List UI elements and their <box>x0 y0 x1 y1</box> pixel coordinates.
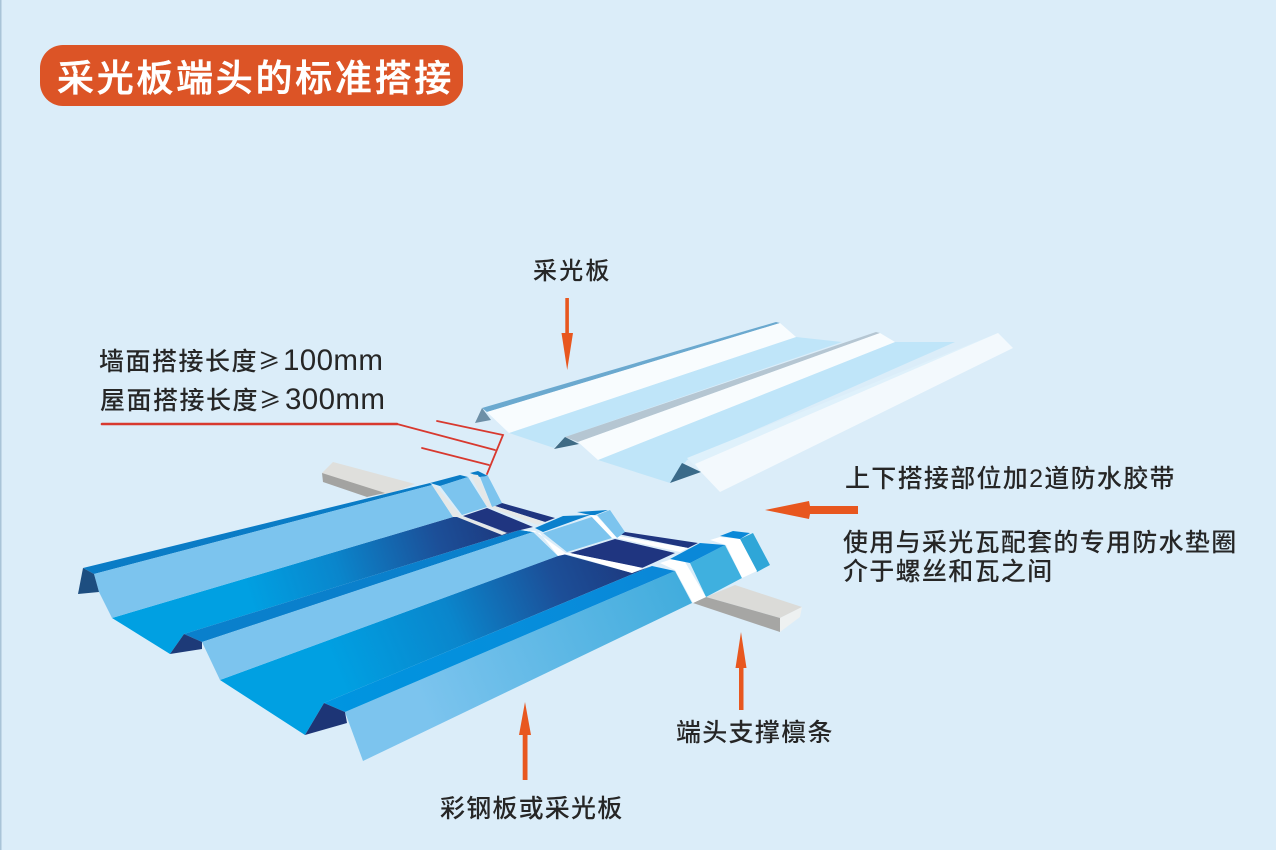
face 2 <box>202 532 558 680</box>
arrow: down to skylight panel <box>562 298 573 370</box>
label: washer instruction <box>843 529 1238 586</box>
pale strip 3 <box>687 333 1005 472</box>
title: 采光板端头的标准搭接 <box>57 58 454 99</box>
ridge strip 1 <box>482 322 780 412</box>
arrow: up to steel panel <box>519 702 531 780</box>
ridge strip 3 <box>324 566 675 712</box>
label: lap lengths: 300mm <box>285 383 385 416</box>
label: washer instruction: 介于螺丝和瓦之间 <box>843 558 1053 586</box>
label: lap lengths: ≥ <box>258 344 280 376</box>
tape on face 1 <box>432 485 462 517</box>
title <box>40 45 463 106</box>
label: steel panel: 彩钢板或采光板 <box>440 795 623 823</box>
ridge strip 2 <box>184 530 533 642</box>
valley 1 <box>509 337 842 448</box>
label: purlin: 端头支撑檩条 <box>676 719 834 747</box>
end triangle 3 <box>670 463 701 483</box>
strip pieces on ridge 3 <box>670 543 725 563</box>
end triangle 2 <box>554 437 579 449</box>
label: washer instruction: 使用与采光瓦配套的专用防水垫圈 <box>843 529 1238 557</box>
end triangles <box>78 568 99 594</box>
ridge strip 1 <box>83 483 432 574</box>
label: skylight panel: 采光板 <box>533 258 612 285</box>
strip pieces beyond tape <box>535 515 590 532</box>
valley 1 <box>112 517 520 654</box>
label: lap lengths: ≥ <box>259 383 281 415</box>
far valley section 1 <box>495 503 555 522</box>
label: tape instruction: 上下搭接部位加2道防水胶带 <box>845 465 1176 493</box>
label: lap lengths: 墙面搭接长度 <box>99 348 258 376</box>
white face 3 <box>695 333 1013 492</box>
ridge strip 2 <box>565 332 880 442</box>
valley 2 <box>220 554 652 735</box>
arrow: left to overlap <box>765 501 858 519</box>
tapes on valleys <box>457 506 545 535</box>
far valley section 2 <box>618 532 698 548</box>
leader lines: lap length <box>102 421 503 474</box>
end triangle 1 <box>475 408 491 423</box>
white face 2 <box>578 333 895 460</box>
upper skylight panel <box>475 322 1013 492</box>
label: lap lengths: 100mm <box>283 344 383 377</box>
label: lap lengths: 屋面搭接长度 <box>100 387 259 415</box>
tape on face 2 <box>520 530 567 556</box>
tape on ridge 3 <box>660 559 706 603</box>
white face 1 <box>487 323 796 433</box>
lower steel panel <box>78 471 770 761</box>
face 3 <box>345 571 692 761</box>
valley 2 <box>598 342 955 483</box>
arrow: up to purlin <box>736 632 746 710</box>
label: lap lengths <box>99 344 385 416</box>
purlin <box>322 462 802 632</box>
face 1 <box>94 485 453 618</box>
